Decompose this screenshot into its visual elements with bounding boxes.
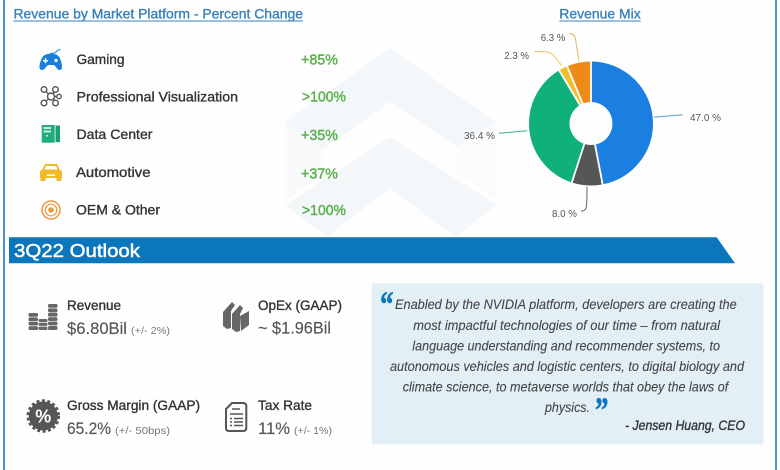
label: 36.4 percent: 36.4 % (464, 130, 495, 142)
icon: opening quote mark: “ (380, 284, 394, 324)
metric: tax rate: Tax Rate (258, 397, 312, 413)
metric: gross margin: (+/- 50bps) (115, 425, 170, 437)
panel: revenue by market platform (14, 6, 346, 219)
donut chart (549, 60, 633, 186)
metric: opex: OpEx (GAAP) (258, 297, 342, 313)
icon: books (223, 302, 249, 332)
quote text: Enabled by the NVIDIA platform, developers are creating the (395, 296, 737, 312)
icon: car (40, 164, 62, 181)
row label: data center: Data Center (76, 126, 153, 142)
label: 2.3 percent: 2.3 % (504, 50, 529, 62)
metric: revenue: $6.80Bil (67, 319, 127, 338)
value: automotive: +37% (301, 166, 338, 182)
icon: target (42, 201, 60, 219)
watermark logo (285, 48, 497, 237)
panel: CEO quote (372, 283, 763, 444)
value: data center: +35% (301, 127, 338, 144)
icon: data center (42, 125, 60, 143)
metric: opex: ~ $1.96Bil (258, 318, 331, 338)
label: 2.3 percent (504, 50, 562, 66)
quote attribution: - Jensen Huang, CEO (625, 417, 745, 433)
metric: tax rate: 11% (258, 419, 290, 438)
row label: oem and other: OEM & Other (76, 202, 160, 218)
metric: revenue (67, 297, 170, 338)
icon: coin stacks (28, 304, 58, 330)
icon: gamepad (40, 50, 62, 70)
label: 8.0 percent: 8.0 % (552, 208, 577, 220)
label: 47.0 percent (654, 112, 721, 124)
value: gaming: +85% (301, 52, 338, 68)
icon: percent badge (28, 400, 59, 432)
banner: 3Q22 outlook: 3Q22 Outlook (14, 240, 141, 261)
metric: tax rate (258, 397, 332, 438)
icon: document (226, 403, 246, 431)
metric: gross margin (67, 397, 200, 438)
panel: outlook metrics (28, 297, 342, 438)
metric: tax rate: (+/- 1%) (294, 425, 332, 437)
quote text: most impactful technologies of our time – from natural (413, 317, 721, 333)
icon: percent badge: % (35, 406, 51, 426)
icon: network nodes (41, 87, 61, 106)
metric: gross margin: 65.2% (67, 419, 111, 438)
quote text: climate science, to metaverse worlds that obey the laws of (403, 379, 730, 395)
heading: revenue mix: Revenue Mix (559, 6, 641, 22)
label: 47.0 percent: 47.0 % (690, 112, 721, 124)
quote text: language understanding and recommender systems, to (412, 338, 720, 354)
row label: automotive: Automotive (76, 164, 151, 180)
row label: professional visualization: Professional Visualization (76, 88, 238, 104)
label: 6.3 percent: 6.3 % (541, 32, 565, 44)
label: 36.4 percent (464, 130, 527, 142)
metric: gross margin: Gross Margin (GAAP) (67, 397, 200, 413)
metric: opex (258, 297, 342, 338)
value: oem and other: >100% (302, 202, 346, 219)
panel: revenue mix (464, 6, 721, 220)
quote text (390, 296, 745, 415)
row label: gaming: Gaming (76, 51, 124, 67)
metric: revenue: (+/- 2%) (131, 325, 170, 337)
metric: revenue: Revenue (67, 297, 121, 313)
icon: closing quote mark: ” (595, 390, 608, 430)
heading: revenue by market platform: Revenue by Market Platform - Percent Change (14, 6, 303, 22)
quote text: physics. (544, 399, 590, 415)
value: professional visualization: >100% (302, 88, 346, 106)
label: 6.3 percent (541, 32, 579, 61)
label: 8.0 percent (552, 187, 587, 220)
quote text: autonomous vehicles and logistic centers, to digital biology and (390, 358, 745, 374)
banner: 3Q22 outlook (9, 237, 735, 263)
